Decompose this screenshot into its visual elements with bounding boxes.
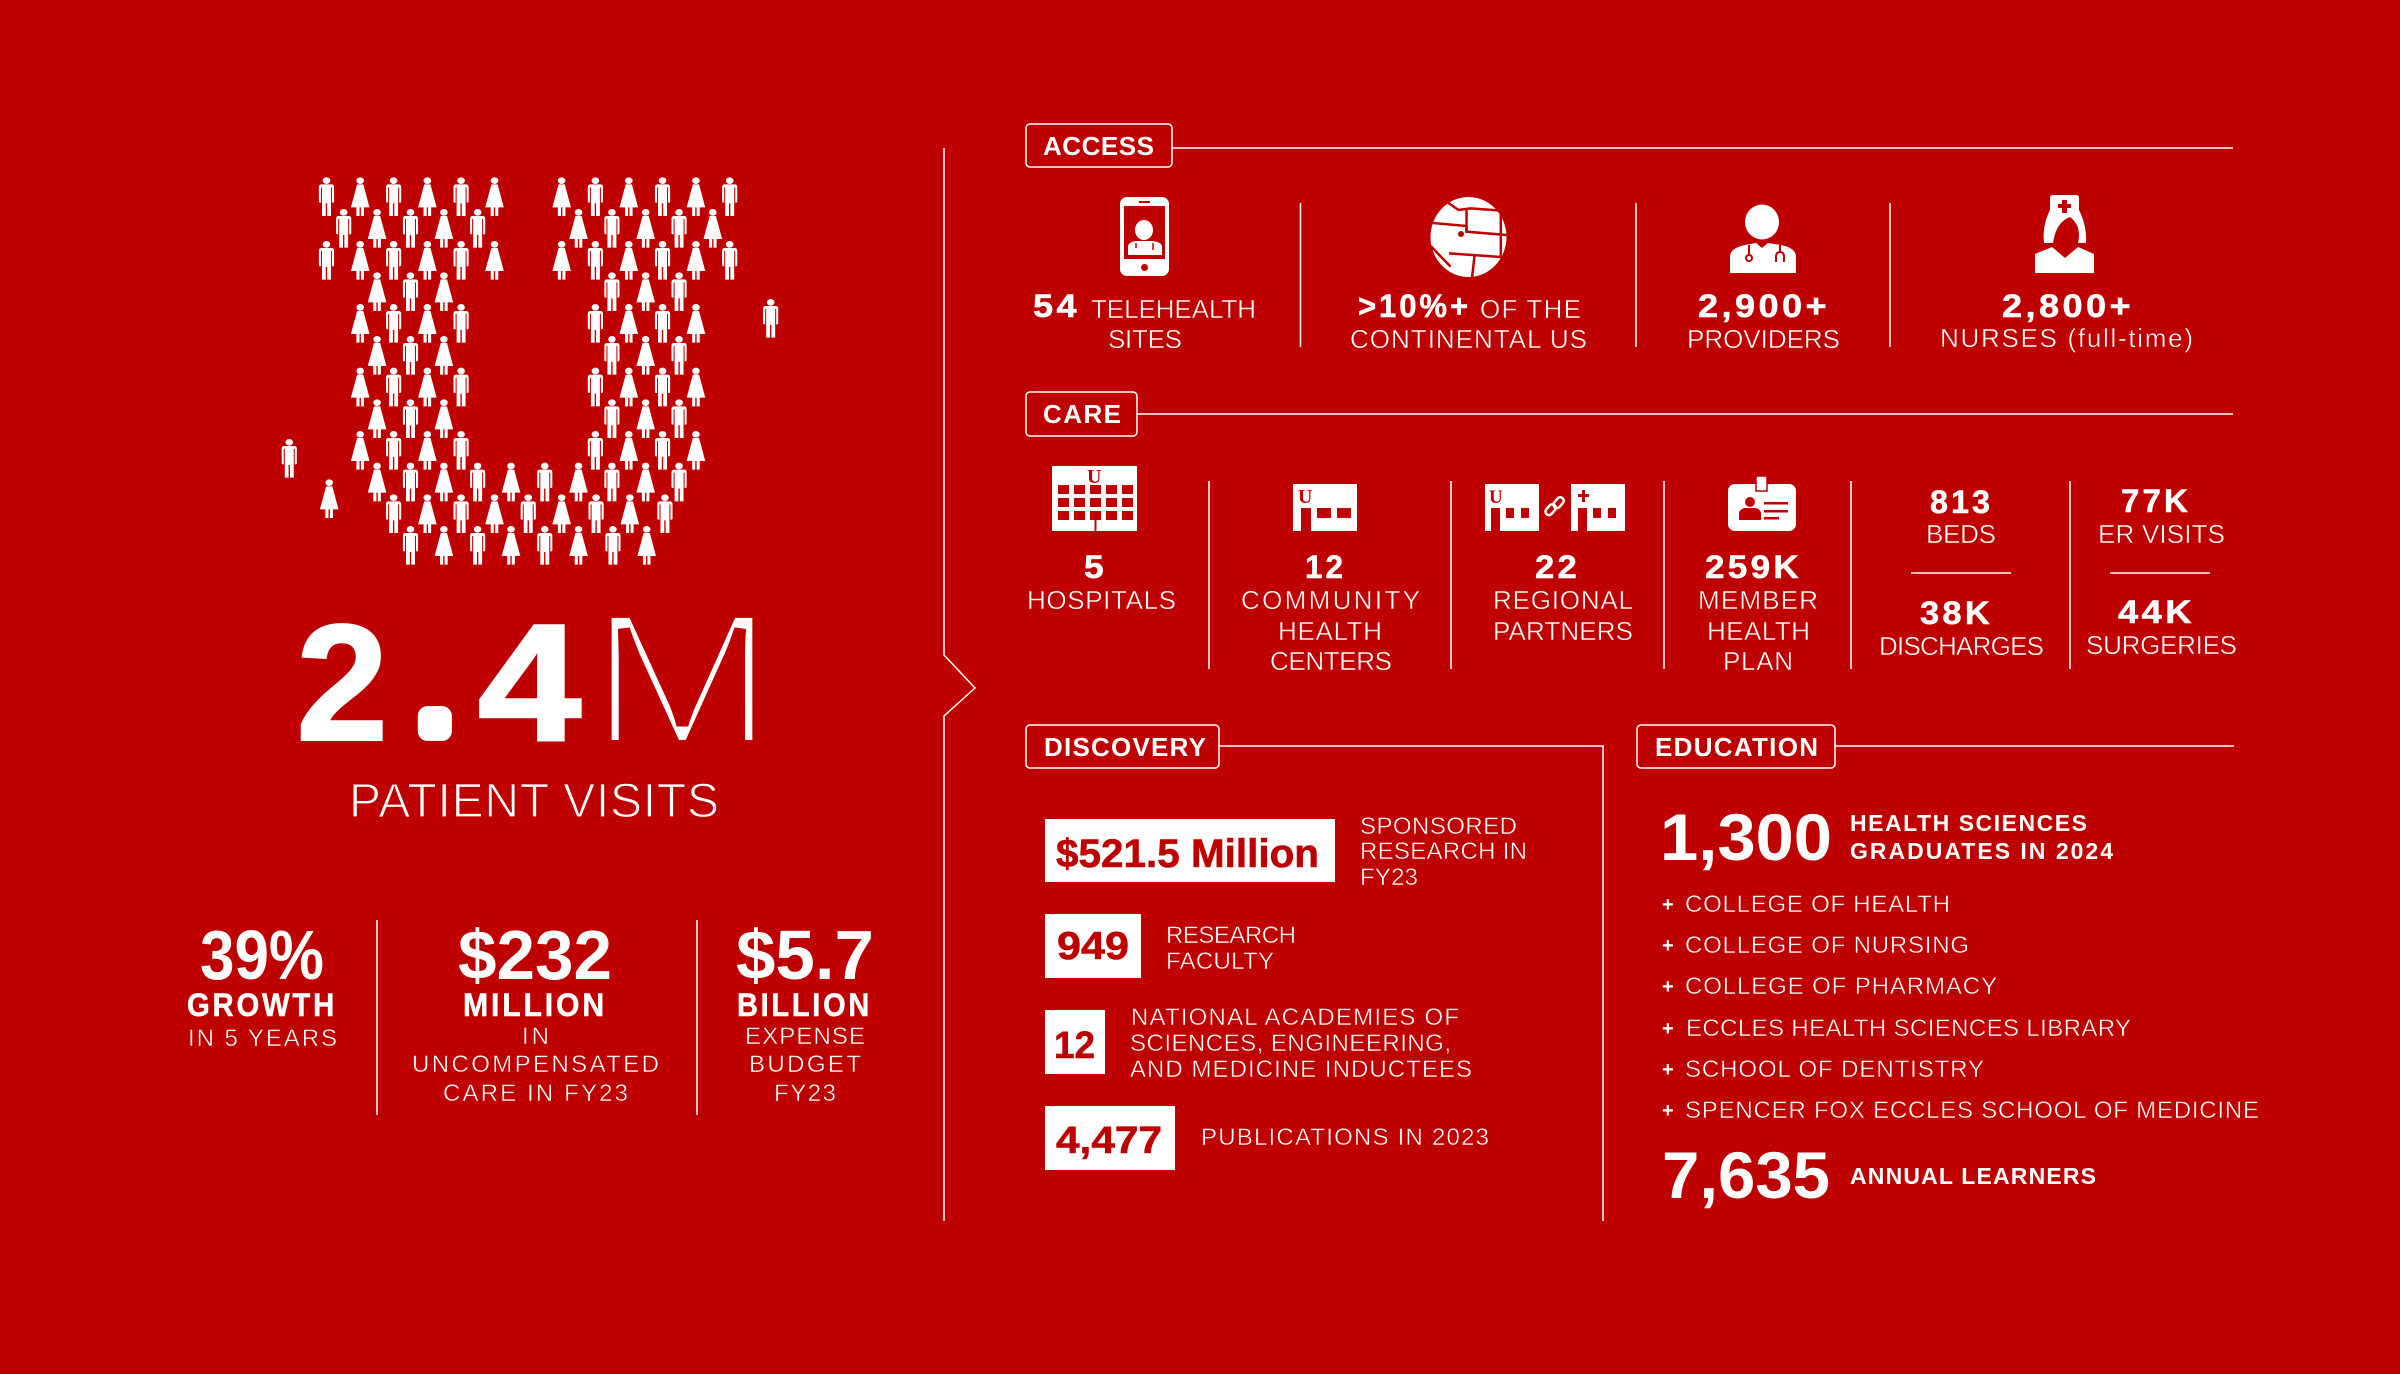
- text: 22 regional partners: [1493, 549, 1633, 646]
- text: 2,900+ providers: [1687, 288, 1840, 354]
- text: 2,800+ nurses: [1940, 288, 2193, 353]
- stat: 12 national academies inductees: AND MEDICINE INDUCTEES: [1130, 1056, 1472, 1083]
- stat: 949 research faculty: RESEARCH: [1166, 922, 1296, 949]
- stat: $232 million: IN: [522, 1023, 549, 1050]
- text: 12 community health centers: 12: [1305, 549, 1346, 585]
- stat: 39% growth: 39%: [200, 916, 324, 994]
- headline: 2.4M patient visits: PATIENT VISITS: [349, 775, 719, 828]
- icon: U made of people: [282, 177, 778, 565]
- text: 77K ER visits and 44K surgeries: ER VISITS: [2098, 519, 2225, 549]
- panel: access: [1026, 124, 2233, 354]
- stat: 1,300 graduates: 1,300: [1660, 800, 1832, 874]
- text: 5 hospitals: HOSPITALS: [1027, 585, 1176, 615]
- stat: 1,300 graduates: [1660, 800, 2113, 874]
- heading: discovery: DISCOVERY: [1044, 732, 1206, 762]
- text: 12 community health centers: CENTERS: [1270, 646, 1392, 676]
- stat: 39% growth: IN 5 YEARS: [188, 1025, 337, 1052]
- text: 77K ER visits and 44K surgeries: [2086, 483, 2237, 660]
- stat: $232 million: [412, 916, 659, 1107]
- icon: provider: [1730, 204, 1796, 273]
- text: 5 hospitals: [1027, 549, 1176, 615]
- text: more than 10% of the continental US: [1350, 288, 1587, 354]
- list: schools and colleges: +: [1662, 894, 1674, 916]
- text: 813 beds and 38K discharges: [1879, 484, 2044, 661]
- text: 2,800+ nurses: NURSES (full-time): [1940, 323, 2193, 353]
- text: 813 beds and 38K discharges: 38K: [1920, 595, 1993, 631]
- stat: 12 national academies inductees: [1045, 1004, 1472, 1083]
- panel: discovery: [1026, 725, 1603, 1221]
- stat: 39% growth: GROWTH: [187, 987, 337, 1023]
- list: schools and colleges: +: [1662, 935, 1674, 957]
- text: more than 10% of the continental US: CONTINENTAL US: [1350, 324, 1587, 354]
- icon: community health center: U: [1298, 486, 1312, 508]
- heading: care: CARE: [1043, 399, 1121, 429]
- stat: 949 research faculty: FACULTY: [1166, 948, 1274, 975]
- text: 813 beds and 38K discharges: DISCHARGES: [1879, 631, 2044, 661]
- stat: $521.5 million: SPONSORED: [1360, 813, 1517, 840]
- headline: 2.4M patient visits: [296, 571, 777, 828]
- text: 259K member health plan: HEALTH: [1707, 616, 1810, 646]
- stat: $521.5 million: FY23: [1360, 864, 1418, 891]
- icon: community health center: [1293, 484, 1357, 531]
- text: 813 beds and 38K discharges: BEDS: [1926, 519, 1996, 549]
- text: 12 community health centers: COMMUNITY: [1241, 585, 1420, 615]
- text: 259K member health plan: 259K: [1705, 549, 1802, 585]
- text: 54 telehealth sites: 54: [1033, 288, 1080, 324]
- list: schools and colleges: +: [1662, 1100, 1674, 1122]
- icon: hospital: [1052, 466, 1137, 531]
- text: 259K member health plan: [1698, 549, 1818, 676]
- icon: linked regional partner buildings: U: [1489, 487, 1503, 508]
- icon: member id badge: [1728, 476, 1796, 531]
- list: schools and colleges: SCHOOL OF DENTISTRY: [1685, 1056, 1984, 1083]
- heading: education: EDUCATION: [1655, 732, 1818, 762]
- text: 2,800+ nurses: 2,800+: [2002, 288, 2134, 324]
- stat: 7,635 annual learners: 7,635: [1662, 1138, 1830, 1212]
- heading: discovery: [1026, 725, 1219, 768]
- list: schools and colleges: +: [1662, 1059, 1674, 1081]
- text: 77K ER visits and 44K surgeries: 77K: [2121, 483, 2191, 519]
- headline: 2.4M patient visits: 2: [296, 591, 388, 776]
- stat: 949 research faculty: 949: [1057, 925, 1129, 968]
- icon: telehealth phone: [1120, 197, 1169, 276]
- stat: $232 million: UNCOMPENSATED: [412, 1051, 659, 1078]
- icon: linked regional partner buildings: [1485, 484, 1625, 531]
- text: 259K member health plan: PLAN: [1723, 646, 1793, 676]
- stat: 1,300 graduates: GRADUATES IN 2024: [1850, 838, 2113, 864]
- stat: $232 million: CARE IN FY23: [443, 1080, 628, 1107]
- stat: 12 national academies inductees: NATIONAL ACADEMIES OF: [1131, 1004, 1459, 1031]
- heading: access: [1026, 124, 1172, 167]
- stat: 7,635 annual learners: ANNUAL LEARNERS: [1850, 1163, 2096, 1189]
- stat: 12 national academies inductees: 12: [1054, 1025, 1095, 1067]
- list: schools and colleges: +: [1662, 1018, 1674, 1040]
- stat: $521.5 million: $521.5 Million: [1056, 832, 1319, 876]
- stat: 7,635 annual learners: [1662, 1138, 2096, 1212]
- stat: $5.7 billion: FY23: [774, 1080, 836, 1107]
- stat: 1,300 graduates: HEALTH SCIENCES: [1850, 810, 2087, 836]
- stat: 4,477 publications: PUBLICATIONS IN 2023: [1201, 1124, 1489, 1151]
- stat: 12 national academies inductees: SCIENCES, ENGINEERING,: [1130, 1030, 1451, 1057]
- stat: $5.7 billion: [736, 916, 874, 1107]
- list: schools and colleges: ECCLES HEALTH SCIENCES LIBRARY: [1686, 1015, 2131, 1042]
- icon: map of continental US globe: [1429, 197, 1506, 277]
- panel: care: [1026, 392, 2237, 676]
- stat: 39% growth: [187, 916, 337, 1052]
- stat: $232 million: MILLION: [463, 987, 607, 1023]
- headline: 2.4M patient visits: 4: [478, 591, 581, 776]
- panel: education: [1637, 725, 2259, 1212]
- text: 259K member health plan: MEMBER: [1698, 585, 1818, 615]
- list: schools and colleges: COLLEGE OF NURSING: [1685, 932, 1969, 959]
- text: 5 hospitals: 5: [1084, 549, 1107, 585]
- text: 22 regional partners: REGIONAL: [1493, 585, 1633, 615]
- text: 22 regional partners: 22: [1535, 549, 1580, 585]
- text: 77K ER visits and 44K surgeries: SURGERIES: [2086, 630, 2237, 660]
- text: 54 telehealth sites: SITES: [1108, 324, 1182, 354]
- text: 813 beds and 38K discharges: 813: [1930, 484, 1993, 520]
- stat: $521.5 million: RESEARCH IN: [1360, 838, 1527, 865]
- stat: $5.7 billion: EXPENSE: [745, 1023, 865, 1050]
- stat: $521.5 million: [1045, 813, 1527, 891]
- text: 77K ER visits and 44K surgeries: 44K: [2118, 594, 2195, 630]
- heading: education: [1637, 725, 1835, 768]
- text: 54 telehealth sites: [1033, 288, 1256, 354]
- list: schools and colleges: [1662, 891, 2259, 1124]
- headline: 2.4M patient visits: M: [587, 571, 777, 786]
- text: 2,900+ providers: PROVIDERS: [1687, 324, 1840, 354]
- stat: 949 research faculty: [1045, 914, 1296, 978]
- list: schools and colleges: SPENCER FOX ECCLES SCHOOL OF MEDICINE: [1685, 1097, 2259, 1124]
- stat: 4,477 publications: [1045, 1106, 1489, 1170]
- stat: 4,477 publications: 4,477: [1056, 1120, 1162, 1162]
- icon: hospital: U: [1087, 466, 1101, 488]
- headline: 2.4M patient visits: .: [421, 641, 449, 753]
- heading: access: ACCESS: [1043, 131, 1154, 161]
- text: 12 community health centers: [1241, 549, 1420, 676]
- text: 2,900+ providers: 2,900+: [1698, 288, 1830, 324]
- list: schools and colleges: COLLEGE OF PHARMACY: [1685, 973, 1997, 1000]
- text: 22 regional partners: PARTNERS: [1493, 616, 1633, 646]
- text: more than 10% of the continental US: >10%+: [1358, 288, 1471, 324]
- stat: $5.7 billion: $5.7: [736, 916, 874, 994]
- icon: nurse: [2035, 195, 2094, 273]
- text: 54 telehealth sites: TELEHEALTH: [1091, 294, 1256, 324]
- stat: $5.7 billion: BUDGET: [749, 1051, 861, 1078]
- text: more than 10% of the continental US: OF THE: [1480, 294, 1581, 324]
- list: schools and colleges: COLLEGE OF HEALTH: [1685, 891, 1950, 918]
- heading: care: [1026, 392, 1137, 436]
- stat: $5.7 billion: BILLION: [737, 987, 872, 1023]
- stat: $232 million: $232: [458, 916, 612, 994]
- text: 12 community health centers: HEALTH: [1278, 616, 1382, 646]
- list: schools and colleges: +: [1662, 976, 1674, 998]
